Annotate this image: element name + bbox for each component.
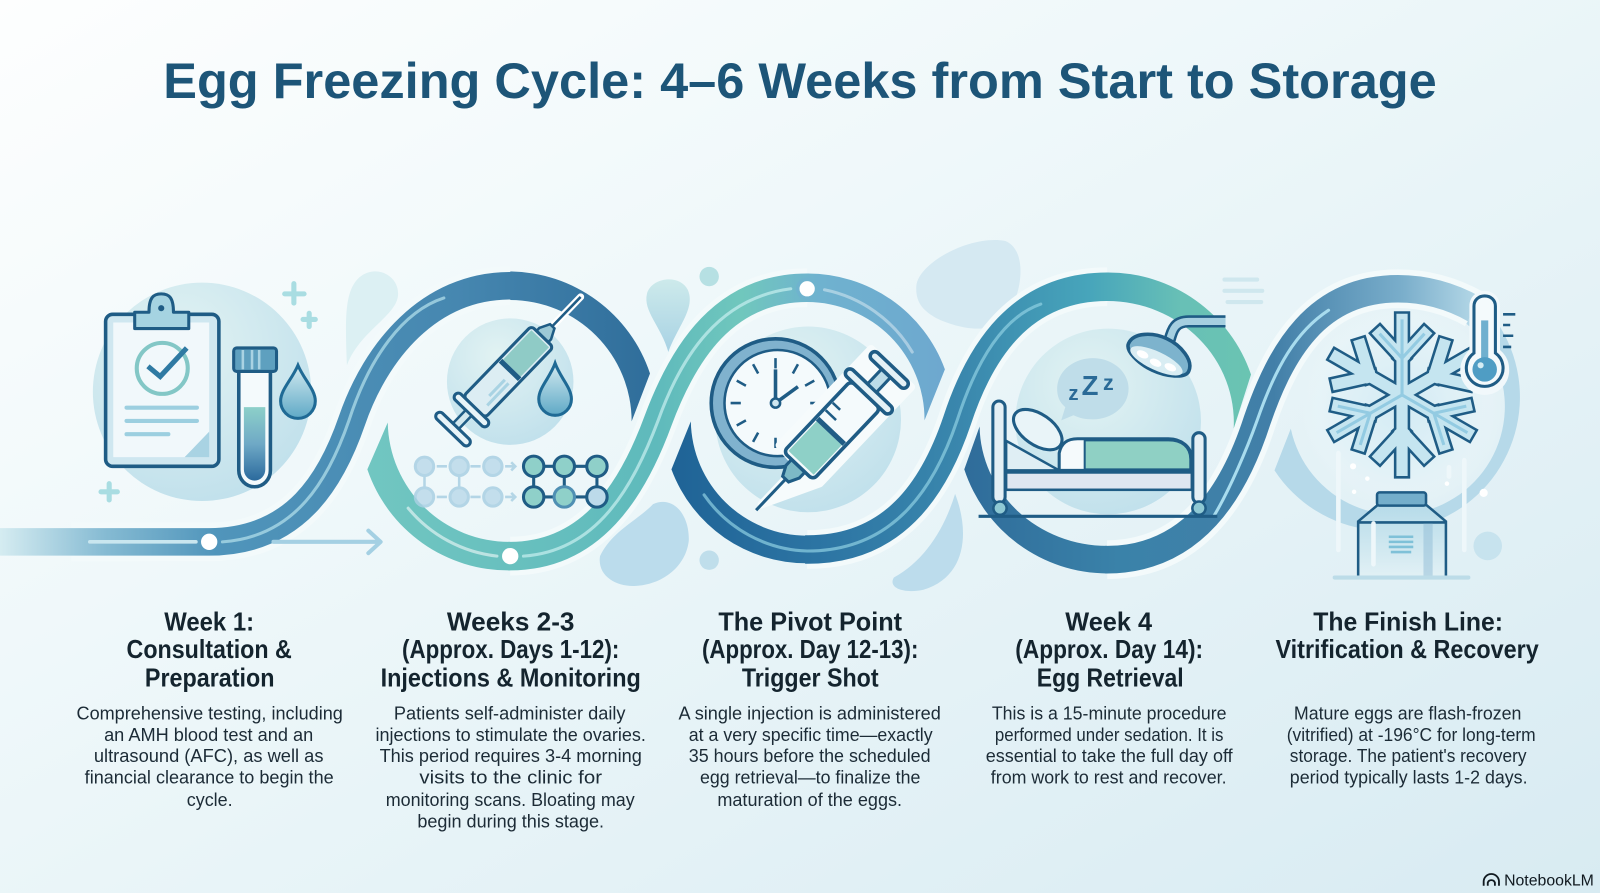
body [376, 702, 646, 832]
ribbon ring 3 start crescent [671, 421, 807, 563]
body: A single injection is administered [679, 702, 941, 723]
body: period typically lasts 1-2 days. [1290, 767, 1528, 788]
body: from work to rest and recover. [991, 767, 1227, 788]
icon: clipboard [106, 294, 219, 466]
heading: Preparation [145, 665, 274, 693]
icon: drop [539, 363, 571, 415]
node 2 [502, 548, 518, 564]
icon: blood test tube [234, 348, 277, 487]
icon: notebook arcs [1484, 874, 1499, 886]
backdrop disc [715, 327, 901, 512]
body: This is a 15-minute procedure [992, 702, 1227, 723]
body: This period requires 3-4 morning [380, 745, 642, 766]
ribbon ring 4 end crescent [1107, 272, 1251, 429]
ribbon ring 2 end crescent [510, 271, 650, 421]
icon group: injection and follicles [415, 281, 607, 507]
brand name: NotebookLM [1504, 873, 1594, 890]
heading: (Approx. Day 14): [1015, 636, 1203, 664]
sleep text: Z [1082, 370, 1099, 401]
heading: Week 4 [1065, 609, 1153, 637]
node 1 [201, 534, 217, 550]
arrow [273, 531, 381, 553]
icon: clock [711, 339, 840, 467]
decorative blobs [346, 240, 1262, 591]
icon: blood drop [281, 365, 315, 418]
body: begin during this stage. [417, 811, 604, 832]
body: essential to take the full day off [986, 745, 1234, 766]
heading [1276, 609, 1540, 664]
body: visits to the clinic for [419, 767, 602, 788]
body [1287, 702, 1536, 788]
heading: (Approx. Days 1-12): [402, 636, 619, 664]
heading: Week 1: [164, 609, 254, 637]
heading: Egg Retrieval [1037, 665, 1184, 693]
timeline ribbon [0, 271, 1520, 573]
cold vapor [1338, 453, 1464, 550]
title: Egg Freezing Cycle: 4–6 Weeks from Start to Storage [163, 53, 1437, 109]
body: cycle. [187, 789, 233, 810]
ribbon segment 1 [0, 286, 512, 542]
body: storage. The patient's recovery [1290, 745, 1527, 766]
body: performed under sedation. It is [995, 724, 1223, 745]
body: an AMH blood test and an [104, 724, 313, 745]
node 3 center [799, 281, 815, 296]
icon: snowflake [1325, 319, 1479, 470]
icon: thermometer [1460, 291, 1515, 395]
heading [127, 609, 292, 693]
ribbon ring 5 light crescent [1274, 291, 1520, 531]
heading: Weeks 2-3 [447, 609, 574, 637]
backdrop glow [1302, 308, 1502, 508]
heading: (Approx. Day 12-13): [702, 636, 918, 664]
icon group: trigger shot clock and syringe [711, 327, 915, 531]
icon group: vitrification [1302, 291, 1515, 578]
heading: The Pivot Point [718, 609, 903, 637]
backdrop disc [447, 318, 573, 445]
ribbon segment 3 [704, 287, 1109, 551]
ribbon ring 4 start crescent [964, 427, 1107, 573]
sparkles [101, 284, 315, 500]
icon group: clipboard, tube, drop [93, 283, 315, 501]
column: Week 4 [986, 609, 1234, 788]
body: maturation of the eggs. [717, 789, 902, 810]
heading: Consultation & [127, 636, 292, 664]
sleep text: z [1068, 383, 1079, 405]
heading: Injections & Monitoring [381, 665, 641, 693]
icon group: retrieval bed and lamp [979, 321, 1226, 516]
speech bubble [1057, 358, 1129, 420]
frost particles [1350, 463, 1488, 497]
column: Weeks 2-3 [376, 609, 646, 832]
body: (vitrified) at -196°C for long-term [1287, 724, 1536, 745]
accent dot [1473, 532, 1502, 560]
heading: Vitrification & Recovery [1276, 636, 1540, 664]
heading [1015, 609, 1203, 693]
icon: bed [979, 401, 1217, 516]
ribbon segment 4 [1105, 289, 1474, 560]
body: Patients self-administer daily [394, 702, 626, 723]
body: injections to stimulate the ovaries. [376, 724, 646, 745]
icon: surgical lamp [1123, 321, 1226, 384]
body: financial clearance to begin the [85, 767, 334, 788]
backdrop disc [1015, 329, 1201, 514]
ribbon segment 2 [408, 288, 912, 556]
ribbon ring 3 end crescent [807, 273, 945, 420]
backdrop disc [93, 283, 311, 501]
node 3 [796, 278, 818, 300]
heading: Trigger Shot [742, 665, 879, 693]
body [986, 702, 1234, 788]
body: Comprehensive testing, including [77, 702, 343, 723]
body: 35 hours before the scheduled [689, 745, 931, 766]
body: Mature eggs are flash-frozen [1294, 702, 1521, 723]
column: Week 1 [77, 609, 343, 810]
body: egg retrieval—to finalize the [700, 767, 920, 788]
watermark [1484, 873, 1594, 890]
heading [381, 609, 641, 693]
body: ultrasound (AFC), as well as [94, 745, 323, 766]
follicles before [415, 457, 515, 506]
body [77, 702, 343, 810]
sleep text: z [1103, 371, 1114, 395]
column: The Finish Line [1276, 609, 1540, 788]
sleep text [1068, 370, 1114, 405]
follicles after [523, 456, 607, 507]
icon: trigger syringe [734, 346, 915, 531]
heading [702, 609, 918, 693]
icon: storage jar [1335, 492, 1468, 578]
icon: syringe [434, 281, 597, 448]
body: at a very specific time—exactly [689, 724, 933, 745]
heading: The Finish Line: [1313, 609, 1503, 637]
ribbon ring 2 start crescent [367, 422, 510, 570]
body [679, 702, 941, 810]
column: The Pivot Point [679, 609, 941, 810]
body: monitoring scans. Bloating may [386, 789, 635, 810]
